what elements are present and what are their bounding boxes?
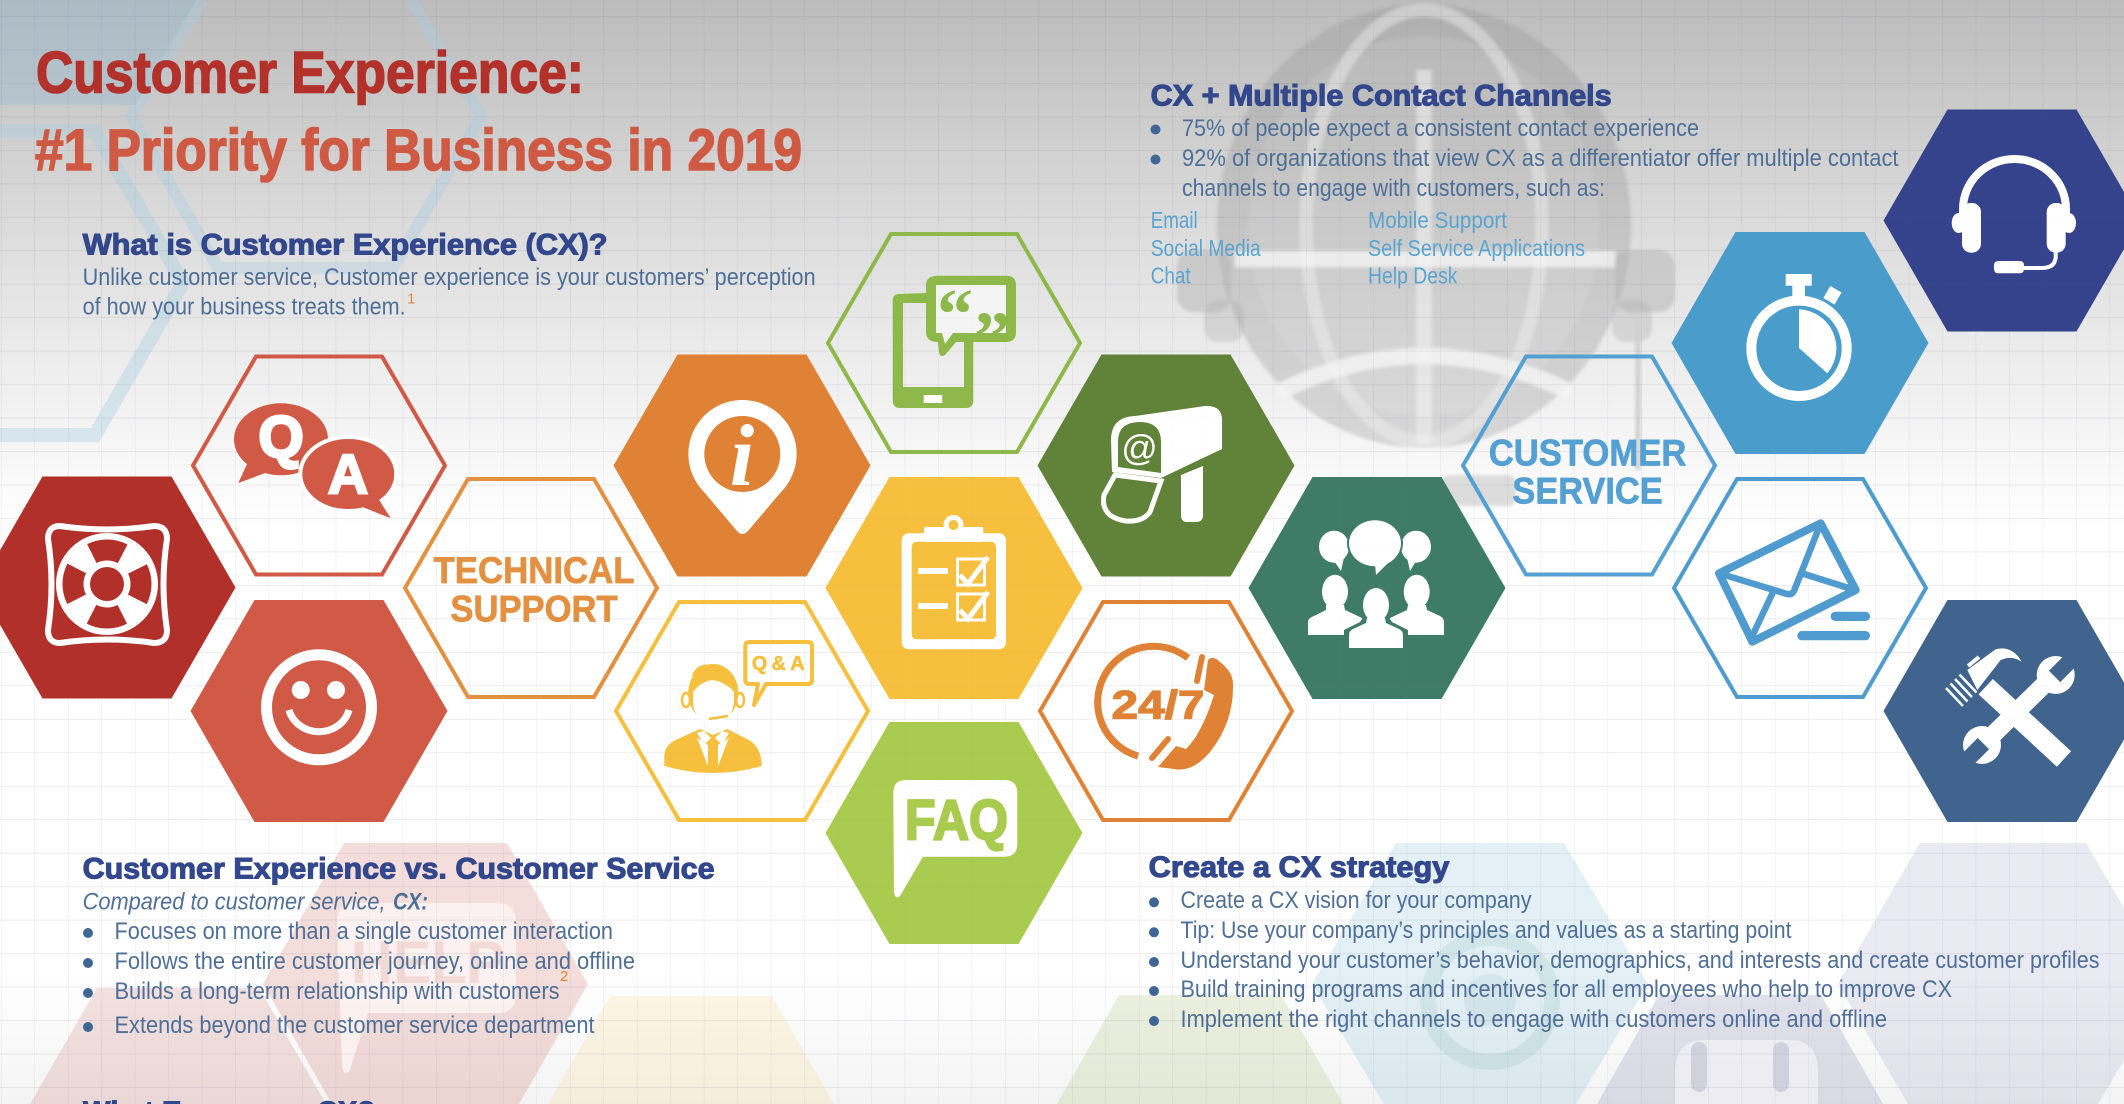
hexagon: Q and A bubbles: A [328,442,368,505]
footnote 1: 1 [407,290,415,308]
hexagon: phone with quote bubble: “ [937,274,973,354]
hexagon: Q and A bubbles [193,356,445,574]
hexagon: customer service: CUSTOMER [1489,432,1686,473]
bullet 2: Follows the entire customer journey, online and offline [114,948,635,975]
hexagon: email megaphone [1038,354,1294,576]
channel list: Chat [1151,263,1191,289]
panel: what is CX [83,228,816,320]
hexagon: smiley [190,600,448,822]
bullet 3: Builds a long-term relationship with customers [114,978,560,1005]
panel: multiple contact channels [1150,80,1899,289]
hexagon: 24/7 phone [1040,602,1292,820]
title [35,40,802,183]
hexagon: lifebuoy [0,476,236,698]
bullet 2: channels to engage with customers, such as: [1182,175,1605,202]
hexagon: technical support: SUPPORT [450,589,618,630]
channel list [1151,207,1585,289]
hexagon: customer service: SERVICE [1512,470,1663,512]
ghost hexagons top left [0,0,481,435]
hexagon: 24/7 phone: 24/7 [1112,683,1204,727]
hexagon: phone with quote bubble [828,234,1080,452]
hexagon: clipboard checklist [826,477,1082,699]
bullet 1: Create a CX vision for your company [1180,887,1532,914]
bullet 2: 92% of organizations that view CX as a differentiator offer multiple contact [1182,145,1899,172]
bullet 1: Focuses on more than a single customer interaction [114,918,613,945]
channel list: Mobile Support [1368,207,1508,233]
bullet 4: Extends beyond the customer service department [114,1012,595,1039]
bullet 2 [1150,145,1899,202]
heading: Customer Experience vs. Customer Service [83,852,715,885]
heading: Create a CX strategy [1149,851,1450,884]
hexagon: phone with quote bubble: ” [974,297,1010,377]
hexagon: agent with Q&A bubble [616,602,868,820]
hexagon: FAQ bubble: FAQ [905,788,1008,852]
footnote 2: 2 [560,968,568,985]
intro line: CX: [393,888,428,915]
hexagon: agent with Q&A bubble: Q&A [752,653,805,675]
panel: create a CX strategy [1149,851,2100,1033]
bullet 2: Tip: Use your company’s principles and values as a starting point [1180,917,1792,944]
bullet 4: Build training programs and incentives for all employees who help to improve CX [1180,976,1952,1003]
hexagon: stopwatch [1672,232,1928,454]
title line 1: Customer Experience: [36,40,584,106]
hexagon: team discussion [1248,477,1506,699]
title line 2: #1 Priority for Business in 2019 [35,118,802,183]
heading: What is Customer Experience (CX)? [83,228,608,262]
hexagon: headset [1884,110,2124,332]
heading: CX + Multiple Contact Channels [1151,80,1612,113]
hexagon: technical support: TECHNICAL [434,550,634,591]
hexagon: technical support [405,479,657,697]
hexagon: info pin: i [730,408,755,505]
channel list: Email [1151,207,1198,233]
bullet 5: Implement the right channels to engage with customers online and offline [1180,1006,1887,1033]
intro line: Compared to customer service, [83,888,386,915]
hexagon: info pin [614,354,870,576]
definition line 1: Unlike customer service, Customer experience is your customers’ perception [83,264,816,291]
ghost hexagons bottom: HELP [351,929,505,996]
hexagon: customer service [1463,356,1715,574]
bullet 1: 75% of people expect a consistent contact experience [1182,115,1699,142]
ghost hexagons bottom [30,843,2124,1104]
hexagon: Q and A bubbles: Q [258,405,304,470]
hexagon: hammer and wrench [1884,600,2124,822]
definition line 2: of how your business treats them. [83,293,406,320]
hexagon: FAQ bubble [826,722,1082,944]
ghost globe with headset [1177,4,1675,506]
channel list: Self Service Applications [1368,235,1585,261]
channel list: Help Desk [1368,263,1458,289]
hexagon: email megaphone: @ [1121,427,1158,468]
hexagon: envelope [1674,479,1926,697]
channel list: Social Media [1151,235,1261,261]
panel: CX vs customer service [83,852,715,1039]
